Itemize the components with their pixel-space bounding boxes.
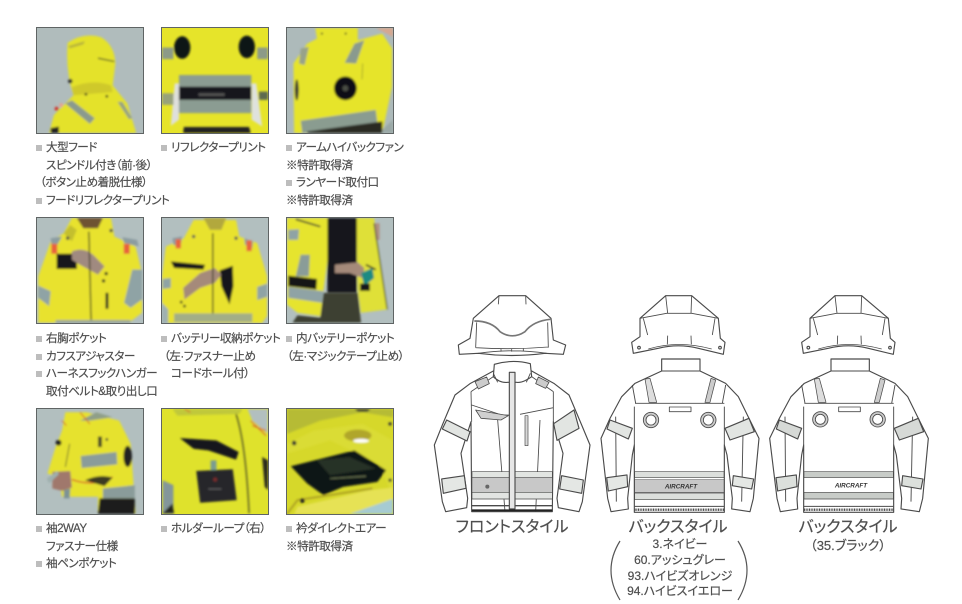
colour list: 60.アッシュグレー (634, 553, 726, 567)
photo: collar direct air (286, 408, 394, 515)
label: front style: フロントスタイル (456, 519, 568, 536)
caption: hood (36, 141, 169, 207)
caption: inner pocket (286, 332, 404, 363)
caption: sleeve (36, 522, 118, 570)
colour list: 94.ハイビスイエロー (627, 584, 733, 598)
caption: chest pocket: ハーネスフックハンガー (46, 367, 157, 380)
caption: battery pocket: コードホール付） (171, 367, 250, 380)
caption: battery pocket: バッテリー収納ポケット (171, 332, 280, 345)
caption: sleeve: 袖2WAY (46, 522, 87, 535)
caption: chest pocket: 右胸ポケット (46, 332, 106, 345)
photo: arm high-back fan (286, 27, 394, 134)
caption: collar air: 衿ダイレクトエアー (296, 522, 386, 535)
photo: right chest pocket (36, 217, 144, 324)
technical drawing: back style jacket (black): AIRCRAFT (834, 483, 868, 490)
caption: inner pocket: 内バッテリーポケット (296, 332, 394, 345)
photo: holder loop (161, 408, 269, 515)
caption: hood: フードリフレクタープリント (46, 194, 169, 207)
caption: fan: ※特許取得済 (286, 194, 353, 207)
caption: hood: 大型フード (46, 141, 97, 154)
caption: fan: ※特許取得済 (286, 159, 353, 172)
caption: sleeve: 袖ペンポケット (46, 557, 116, 570)
photo: large hood (36, 27, 144, 134)
caption: chest pocket (36, 332, 157, 398)
caption: reflector: リフレクタープリント (171, 141, 266, 154)
caption: battery pocket: （左·ファスナー止め (164, 350, 255, 363)
caption: battery pocket (161, 332, 280, 380)
colour list: 3.ネイビー (653, 537, 707, 551)
photo: sleeve 2way (36, 408, 144, 515)
caption: holder loop: ホルダーループ（右） (171, 522, 266, 535)
photo: inner battery pocket (286, 217, 394, 324)
colour list: 93.ハイビズオレンジ (628, 569, 732, 583)
photo: battery pocket (161, 217, 269, 324)
caption: hood: スピンドル付き（前·後） (46, 159, 152, 172)
black colour note: （35.ブラック） (810, 538, 886, 553)
caption: sleeve: ファスナー仕様 (46, 540, 118, 553)
caption: fan: ランヤード取付口 (296, 176, 379, 189)
caption: collar air (286, 522, 386, 553)
caption: chest pocket: カフスアジャスター (46, 350, 135, 363)
colour list (627, 537, 733, 598)
caption: inner pocket: （左·マジックテープ止め） (287, 350, 404, 363)
caption: chest pocket: 取付ベルト&取り出し口 (46, 385, 157, 398)
caption: fan: アームハイバックファン (296, 141, 403, 154)
photo: reflector print (161, 27, 269, 134)
label: back style colours: バックスタイル (628, 519, 728, 536)
technical drawing: back style jacket (colours): AIRCRAFT (664, 483, 698, 490)
label: back style black: バックスタイル (798, 519, 898, 536)
caption: fan (286, 141, 404, 207)
caption: hood: （ボタン止め着脱仕様） (40, 176, 147, 189)
caption: collar air: ※特許取得済 (286, 540, 353, 553)
